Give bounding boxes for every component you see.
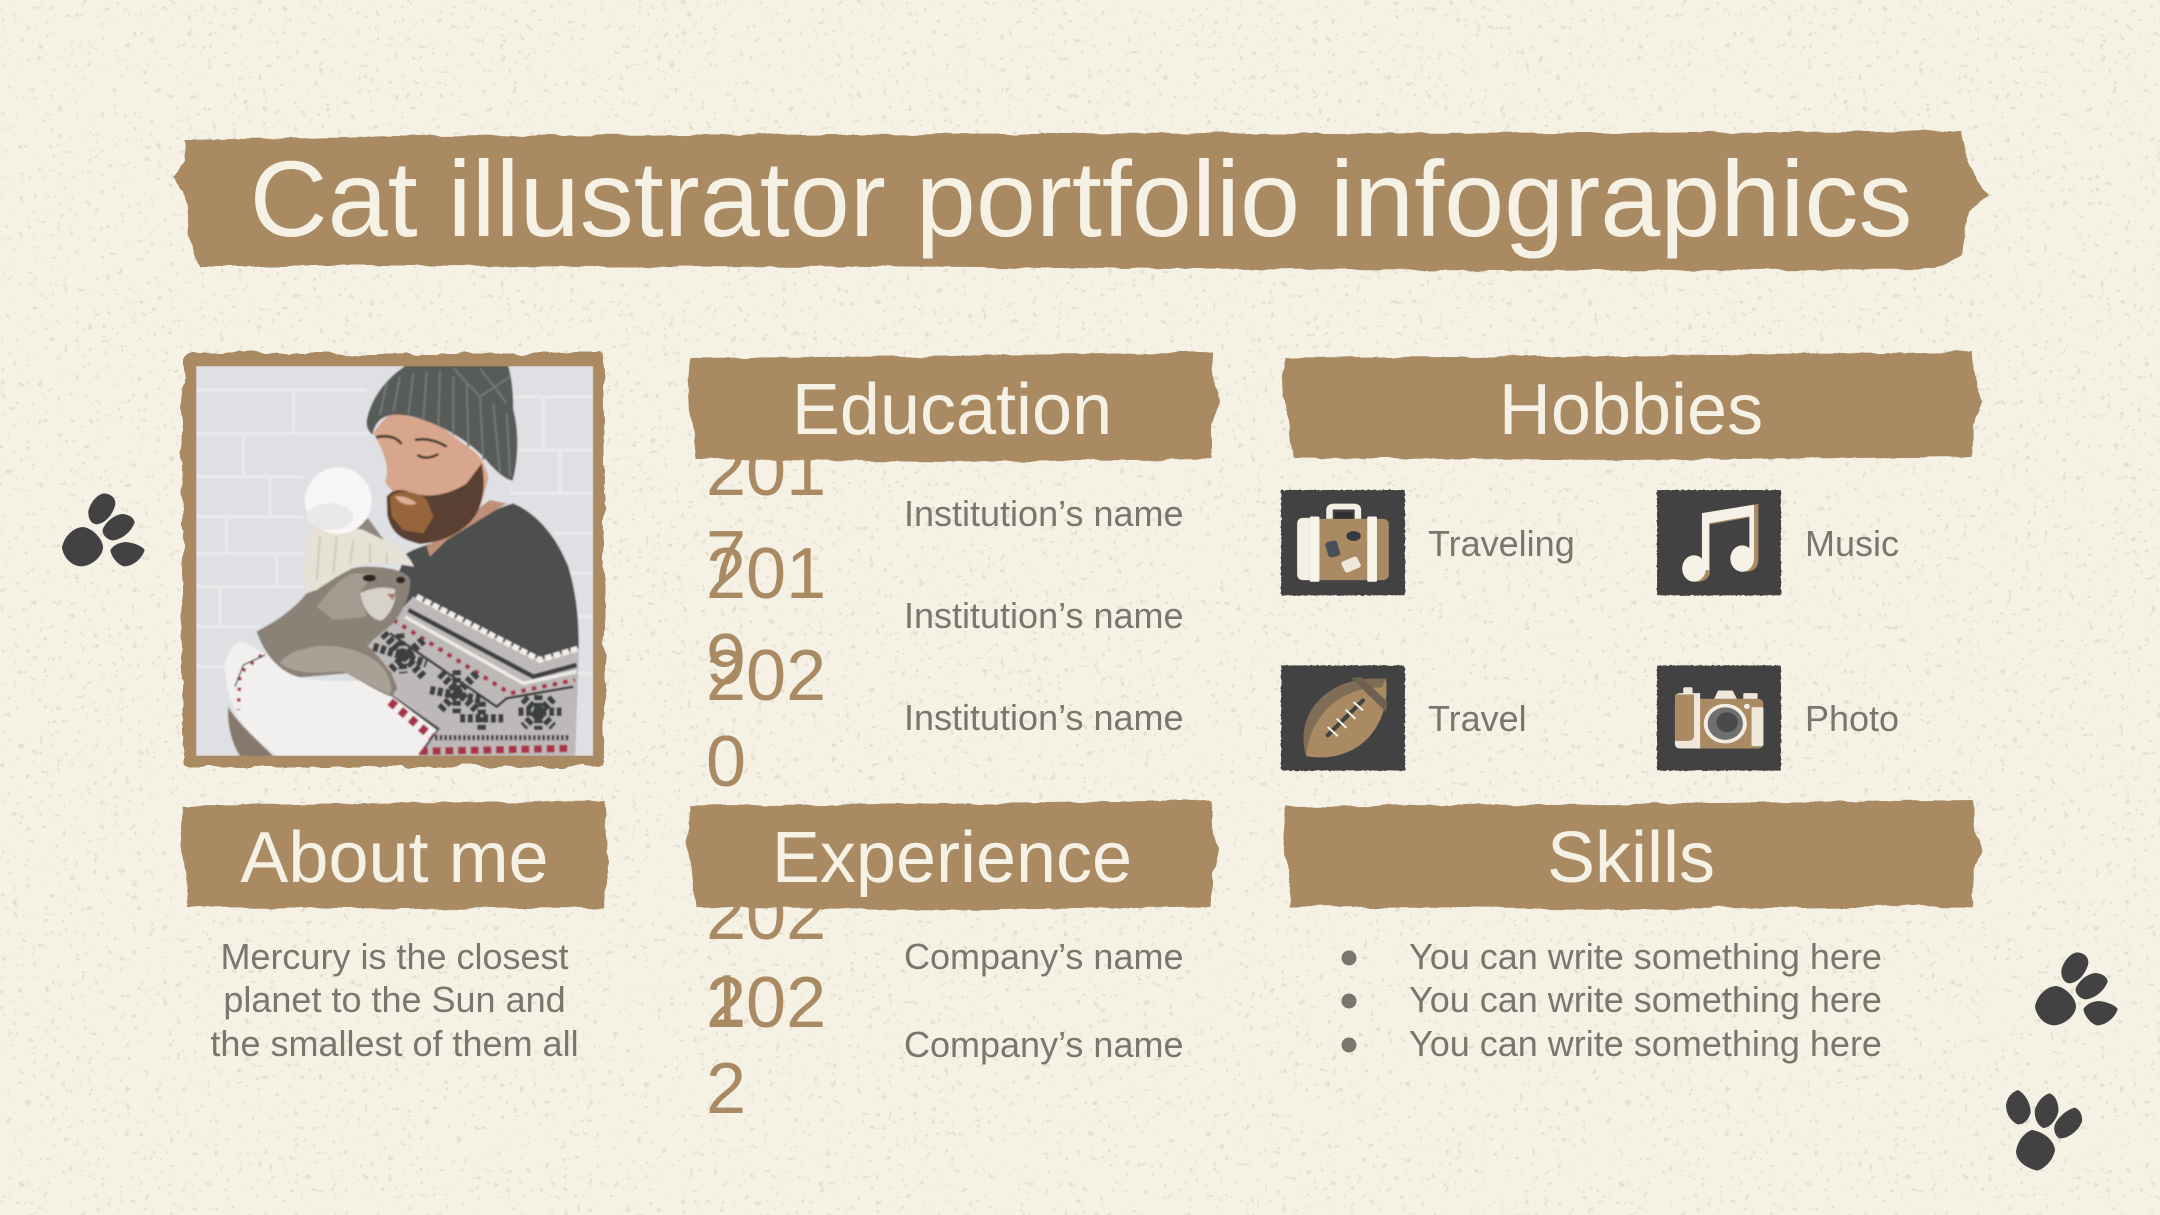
heading: about me xyxy=(181,801,609,909)
icon: paw right xyxy=(2035,952,2118,1025)
panel: hobbies xyxy=(1281,352,1981,771)
label: traveling: Traveling xyxy=(1428,523,1575,564)
years: experience xyxy=(706,875,826,1129)
photo with torn frame xyxy=(182,353,604,767)
label: music: Music xyxy=(1805,523,1899,564)
beard xyxy=(387,463,484,544)
white sleeve xyxy=(225,642,437,756)
face xyxy=(372,414,489,507)
hat xyxy=(367,366,517,481)
panel: education xyxy=(687,352,1220,738)
heading: experience xyxy=(687,800,1220,910)
years: experience: 202 xyxy=(706,875,826,955)
icon: suitcase xyxy=(1280,489,1406,596)
skills list: You can write something here xyxy=(1409,936,1882,977)
experience entries xyxy=(904,936,1183,1065)
experience entries: Company’s name xyxy=(904,1024,1183,1065)
neck xyxy=(427,500,507,557)
education entries: Institution’s name xyxy=(904,493,1184,534)
heading: education: Education xyxy=(792,370,1112,450)
about text: the smallest of them all xyxy=(210,1023,579,1064)
skills list: You can write something here xyxy=(1409,979,1882,1020)
title: Cat illustrator portfolio infographics xyxy=(250,138,1912,259)
education entries: Institution’s name xyxy=(904,697,1184,738)
icon: paw left xyxy=(62,493,145,566)
cat beanie xyxy=(304,526,414,593)
about text: planet to the Sun and xyxy=(223,979,566,1020)
heading: experience: Experience xyxy=(772,818,1132,898)
cat xyxy=(257,567,410,697)
years: education: 201 xyxy=(706,534,826,614)
years: experience: 2 xyxy=(706,1049,746,1129)
years: education xyxy=(706,431,826,802)
education entries: Institution’s name xyxy=(904,595,1184,636)
label: photo: Photo xyxy=(1805,698,1899,739)
skills list: You can write something here xyxy=(1409,1023,1882,1064)
patterned lower sweater xyxy=(365,597,579,756)
about text: Mercury is the closest xyxy=(220,936,569,977)
experience entries: Company’s name xyxy=(904,936,1183,977)
skills list xyxy=(1342,936,1882,1064)
icon: paw bottom right xyxy=(2006,1090,2082,1171)
years: education: 0 xyxy=(706,722,746,802)
years: education: 202 xyxy=(706,636,826,716)
icon: football xyxy=(1280,664,1406,772)
about text xyxy=(210,936,579,1064)
panel: about me xyxy=(181,801,609,1064)
years: experience: 1 xyxy=(706,961,746,1041)
heading: about me: About me xyxy=(240,818,549,898)
icon: music notes xyxy=(1656,490,1782,596)
title banner xyxy=(174,131,1988,271)
icon: camera xyxy=(1656,664,1782,772)
education entries xyxy=(904,493,1184,738)
heading: skills: Skills xyxy=(1547,818,1715,898)
heading: education xyxy=(687,352,1220,462)
pompom xyxy=(305,467,372,534)
heading: skills xyxy=(1282,800,1981,909)
panel: experience xyxy=(687,800,1220,1065)
years: education: 201 xyxy=(706,431,826,511)
years: experience: 202 xyxy=(706,963,826,1043)
label: travel: Travel xyxy=(1428,698,1527,739)
years: education: 9 xyxy=(706,620,746,700)
panel: skills xyxy=(1282,800,1981,1064)
heading: hobbies: Hobbies xyxy=(1499,370,1763,450)
years: education: 7 xyxy=(706,517,746,597)
photo: man holding cat xyxy=(196,366,593,756)
heading: hobbies xyxy=(1282,352,1981,460)
sweater xyxy=(367,503,579,756)
